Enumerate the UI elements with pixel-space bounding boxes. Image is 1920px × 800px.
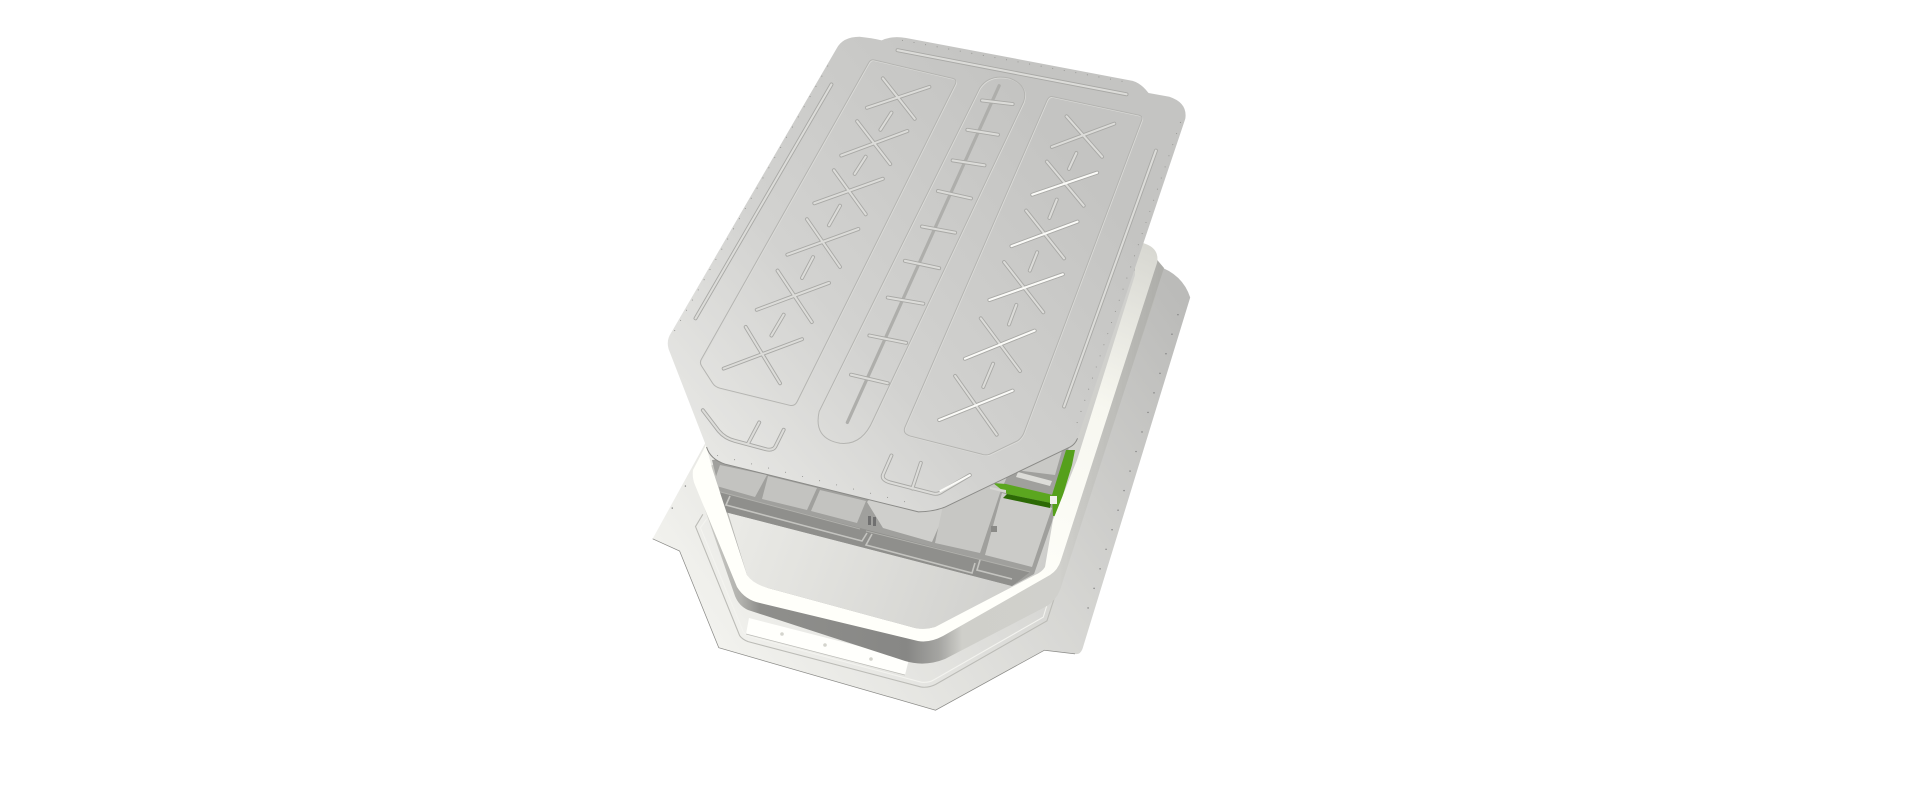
module 4 [867, 488, 962, 542]
cover plate lower shadow edge [707, 438, 1078, 512]
connectors [868, 516, 871, 525]
central rib [847, 86, 999, 422]
embossed cross ribs [696, 50, 1156, 494]
top cover plate [668, 37, 1186, 512]
module 3 [811, 490, 866, 523]
dark gaps behind modules [712, 420, 1075, 586]
band frame highlights [726, 496, 1012, 579]
module 5 [935, 470, 1010, 553]
green busbar horizontal [993, 483, 1053, 503]
module 6 [985, 493, 1052, 567]
white mounting bracket [746, 618, 909, 675]
tray outer wall [693, 243, 1164, 664]
module 1 [713, 465, 767, 497]
cover plate rivets [675, 40, 1180, 504]
bottom base plate [653, 260, 1190, 710]
far module [1015, 440, 1065, 475]
green busbar vertical [1052, 450, 1075, 516]
dark front band [713, 490, 1030, 586]
base plate rivets [1085, 315, 1178, 618]
battery module area [712, 420, 1075, 586]
module 2 [762, 476, 817, 510]
bright highlighted ribs [939, 173, 1097, 491]
tray white rim [693, 243, 1157, 641]
embossed panel outlines [700, 60, 1143, 456]
white connector block [1050, 496, 1057, 504]
tray floor [712, 270, 1140, 629]
